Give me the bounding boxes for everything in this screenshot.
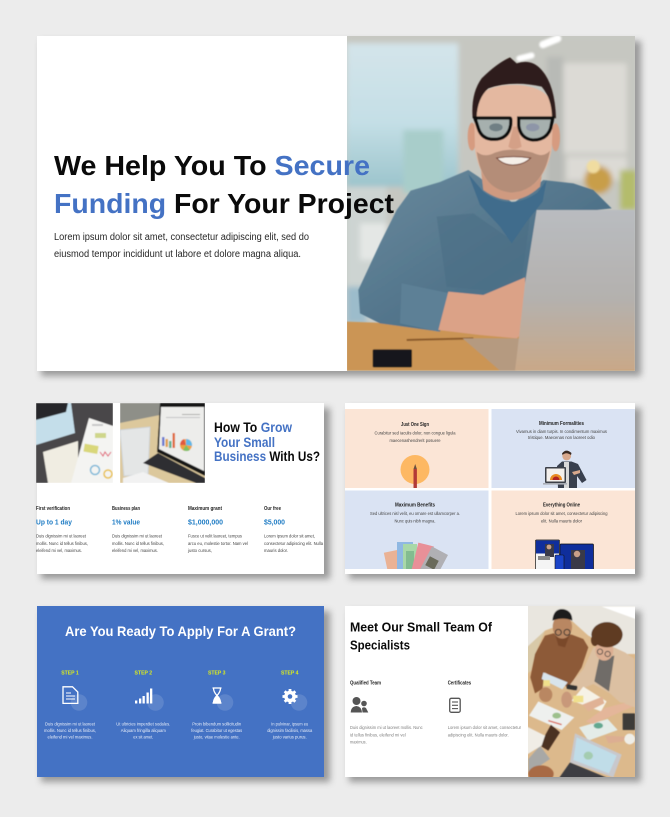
column: certificates bbox=[448, 681, 521, 737]
step 3: STEP 3 bbox=[208, 670, 225, 676]
column: our free: consectetur adipiscing elit. Nulla bbox=[264, 541, 324, 546]
panel: apply for a grant slide bbox=[37, 606, 324, 777]
face bbox=[474, 85, 553, 193]
icon: two people bbox=[351, 697, 368, 712]
card: just one sign bbox=[345, 409, 488, 488]
arm across table bbox=[587, 704, 631, 724]
column: our free: Our free bbox=[264, 506, 281, 512]
team photo bbox=[525, 604, 638, 783]
column: qualified team: Qualified Team bbox=[350, 681, 381, 687]
column: our free: mauris dolor. bbox=[264, 548, 288, 553]
column: first verification: eleifend mi vel, maximus. bbox=[36, 548, 82, 553]
card: maximum benefits: Sed ultrices nisl velit, eu ornare est ullamcorper a. bbox=[370, 511, 460, 516]
icon: fan of banknotes bbox=[384, 542, 448, 569]
column: first verification: Up to 1 day bbox=[36, 518, 73, 526]
card: everything online bbox=[492, 490, 635, 574]
card: just one sign: Just One Sign bbox=[401, 422, 429, 428]
column: our free bbox=[264, 506, 324, 553]
papers bbox=[542, 672, 568, 689]
right person head and curly hair bbox=[596, 644, 614, 662]
column: maximum grant: Fusce ut velit laoreet, tempus bbox=[188, 534, 243, 538]
column: qualified team: id tellus finibus, eleifend mi vel bbox=[350, 732, 406, 737]
hand bbox=[438, 277, 527, 338]
heading: Specialists bbox=[350, 638, 410, 652]
card: everything online: Lorem ipsum dolor sit amet, consectetur adipiscing bbox=[516, 511, 608, 516]
column: certificates: Lorem ipsum dolor sit amet, consectetur bbox=[448, 725, 521, 730]
step 3: feugiat. Curabitur ut egestas bbox=[191, 728, 243, 733]
card: everything online: elit. Nulla mauris dolor bbox=[541, 519, 582, 524]
column: first verification bbox=[36, 506, 88, 553]
column: qualified team: Duis dignissim mi ut laoreet mollis. Nunc bbox=[350, 725, 423, 730]
step 1: STEP 1 bbox=[61, 670, 79, 676]
step 2 bbox=[116, 670, 170, 740]
hero heading: We Help You To Secure bbox=[54, 150, 370, 181]
notebook and cup bbox=[623, 713, 635, 730]
column: business plan bbox=[112, 506, 164, 553]
card: minimum formalities: Minimum Formalities bbox=[539, 421, 584, 427]
photo: laptop with charts and tablet bbox=[120, 403, 205, 483]
icon: man holding laptop bbox=[543, 451, 586, 488]
column: certificates: Certificates bbox=[448, 681, 471, 687]
icon: pencil on circle bbox=[400, 455, 430, 488]
heading: Business With Us? bbox=[214, 449, 320, 464]
sweater bbox=[358, 170, 612, 332]
column: maximum grant: Maximum grant bbox=[188, 506, 222, 512]
heading: Meet Our Small Team Of bbox=[350, 620, 493, 634]
step 3: Proin bibendum sollicitudin bbox=[192, 722, 242, 726]
step 2: Aliquam fringilla aliquam bbox=[121, 728, 166, 733]
column: business plan: Business plan bbox=[112, 506, 140, 512]
hero heading bbox=[54, 150, 394, 219]
column: our free: $5,000 bbox=[264, 518, 285, 526]
card: just one sign: Curabitur sed iaculis dolor, non congue ligula bbox=[374, 430, 456, 436]
panel: how to grow slide bbox=[36, 403, 324, 574]
hair bbox=[472, 57, 556, 118]
laptop bbox=[463, 338, 520, 371]
hero body text bbox=[54, 232, 309, 260]
smile bbox=[497, 157, 531, 165]
card: maximum benefits: Maximum Benefits bbox=[395, 502, 435, 508]
heading bbox=[214, 420, 320, 464]
column: our free: Lorem ipsum dolor sit amet, bbox=[264, 534, 315, 538]
column: first verification: Duis dignissim mi ut laoreet bbox=[36, 534, 87, 538]
hero heading: Funding For Your Project bbox=[54, 188, 394, 219]
card: minimum formalities bbox=[492, 409, 635, 488]
panel: four benefits slide bbox=[345, 403, 635, 582]
card: maximum benefits: Nunc quis nibh magna. bbox=[394, 519, 436, 524]
hero body text: eiusmod tempor incididunt ut labore et dolore magna aliqua. bbox=[54, 249, 301, 260]
card: everything online: Everything Online bbox=[543, 502, 580, 508]
step 4 bbox=[267, 670, 313, 740]
wrist bbox=[561, 692, 572, 708]
column: qualified team: maximus. bbox=[350, 740, 367, 745]
neck bbox=[480, 171, 542, 201]
step 1: eleifend mi vel maximus. bbox=[48, 734, 92, 740]
laptop bbox=[570, 733, 622, 777]
right person blazer bbox=[570, 647, 634, 704]
column: business plan: 1% value bbox=[112, 518, 140, 526]
hero photo: smiling man at laptop bbox=[347, 34, 637, 372]
column: certificates: adipiscing elit. Nulla mauris dolor. bbox=[448, 732, 509, 737]
icon: rising bars bbox=[135, 688, 152, 704]
heading: Your Small bbox=[214, 435, 275, 450]
icon: gear bbox=[282, 689, 298, 704]
step 2: Ut ultricies imperdiet sodales. bbox=[116, 722, 170, 726]
icon: certificate document bbox=[450, 698, 460, 712]
step 4: In pulvinar, ipsum eu bbox=[271, 722, 309, 726]
white strip restoring slide edge bbox=[37, 36, 347, 371]
heading bbox=[350, 620, 493, 652]
heading: How To Grow bbox=[214, 420, 292, 435]
panel: team slide bbox=[345, 604, 638, 783]
column: maximum grant: arcu eu, molestie tortor. Nam vel bbox=[188, 541, 248, 546]
glasses bbox=[475, 118, 553, 140]
icon: responsive website devices bbox=[535, 540, 594, 569]
card: just one sign: maecenashendrerit posuere bbox=[390, 438, 441, 443]
table bbox=[347, 322, 635, 371]
step 2: ex sit amet. bbox=[133, 734, 153, 740]
step 4: STEP 4 bbox=[281, 670, 298, 676]
icon: hourglass bbox=[212, 688, 222, 703]
step 3: justo, vitae molestie ante. bbox=[193, 734, 240, 740]
step 1 bbox=[44, 670, 96, 740]
step 3 bbox=[191, 670, 243, 740]
hero body text: Lorem ipsum dolor sit amet, consectetur adipiscing elit, sed do bbox=[54, 232, 309, 243]
ears bbox=[468, 123, 476, 151]
card: minimum formalities: Vivamus in diam turpis. In condimentum maximus bbox=[516, 429, 608, 434]
photo: reports on dark desk bbox=[36, 403, 113, 483]
left person bbox=[530, 633, 588, 693]
heading: Are You Ready To Apply For A Grant? bbox=[65, 623, 296, 639]
column: business plan: mollis. Nunc id tellus finibus, bbox=[112, 541, 164, 546]
column: business plan: Duis dignissim mi ut laoreet bbox=[112, 534, 163, 538]
column: qualified team bbox=[350, 681, 423, 745]
column: business plan: eleifend mi vel, maximus. bbox=[112, 548, 158, 553]
dark arm bbox=[540, 725, 560, 751]
panel: hero slide bbox=[37, 34, 637, 372]
nose shadow bbox=[508, 127, 522, 149]
step 1: mollis. Nunc id tellus finibus, bbox=[44, 728, 96, 733]
column: maximum grant: $1,000,000 bbox=[188, 518, 223, 526]
collar bbox=[468, 174, 547, 243]
icon: document bbox=[63, 687, 78, 703]
card: maximum benefits bbox=[345, 490, 488, 569]
column: first verification: mollis. Nunc id tellus finibus, bbox=[36, 541, 88, 546]
step 4: dignissim facilisis, massa bbox=[267, 728, 313, 733]
stubble bbox=[477, 150, 550, 193]
step 4: justo varius purus. bbox=[272, 734, 307, 740]
cuff bbox=[400, 286, 448, 332]
column: first verification: First verification bbox=[36, 506, 70, 512]
step 2: STEP 2 bbox=[135, 670, 152, 676]
card: minimum formalities: tristique. Maecenas non laoreet odio bbox=[528, 435, 595, 440]
column: maximum grant bbox=[187, 506, 248, 553]
column: maximum grant: justo cursus, bbox=[187, 548, 212, 553]
step 1: Duis dignissim mi ut laoreet bbox=[45, 722, 96, 726]
